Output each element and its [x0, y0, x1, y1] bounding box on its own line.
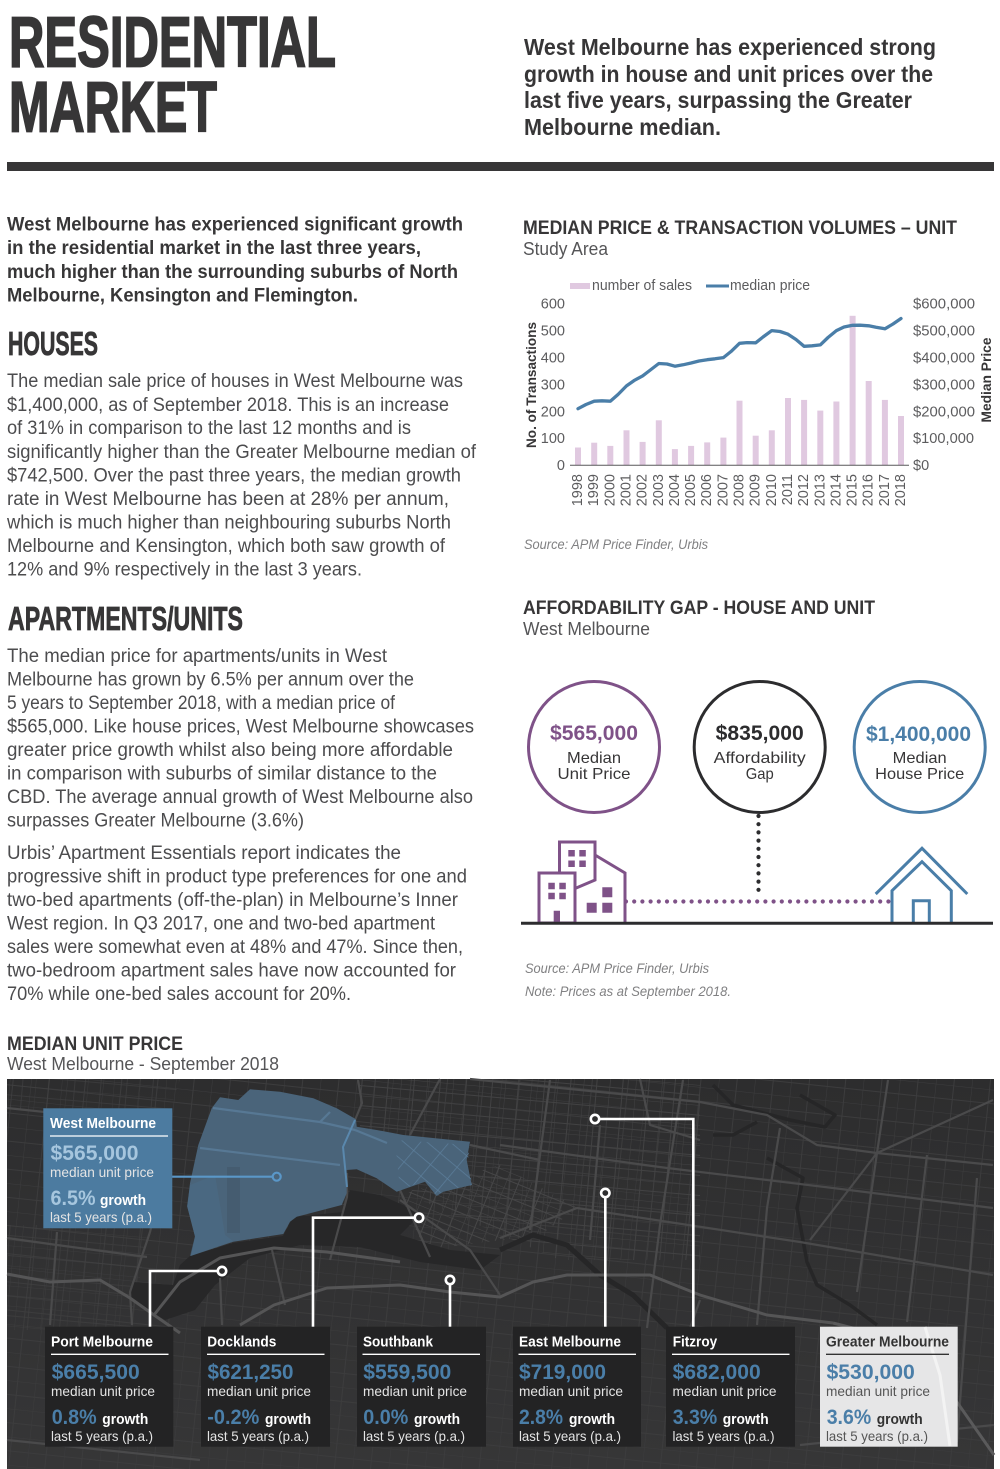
circle: median unit price	[528, 682, 660, 812]
card: southbank: 0.0%	[363, 1406, 409, 1429]
year labels: 2015	[845, 474, 861, 506]
year labels: 2005	[683, 474, 699, 506]
legend: number of sales	[592, 278, 692, 294]
right axis labels	[913, 296, 975, 474]
card: docklands: growth	[265, 1412, 311, 1428]
right axis labels: $500,000	[913, 324, 975, 340]
year labels: 1999	[586, 474, 602, 506]
card: southbank: median unit price	[363, 1383, 467, 1399]
card: port melbourne: growth	[102, 1412, 148, 1428]
year labels: 2000	[602, 474, 618, 506]
year labels: 2010	[764, 474, 780, 506]
card: southbank	[357, 1327, 486, 1447]
card: east melbourne	[513, 1327, 641, 1447]
lead statement: Melbourne median.	[524, 114, 721, 140]
left axis labels: 300	[541, 378, 565, 394]
year labels: 2004	[667, 474, 683, 506]
map heading	[7, 1034, 279, 1074]
card: fitzroy: median unit price	[672, 1383, 777, 1399]
circle: median unit price: Unit Price	[558, 766, 631, 783]
legend: median price	[730, 278, 810, 294]
bars: number of sales	[575, 316, 904, 465]
icon: apartment buildings	[539, 842, 625, 923]
year labels: 1998	[570, 474, 586, 506]
chart heading: MEDIAN PRICE & TRANSACTION VOLUMES – UNIT	[523, 218, 957, 239]
line: median price	[578, 318, 901, 409]
left axis labels: 500	[541, 324, 565, 340]
right axis labels: $0	[913, 458, 929, 474]
card: fitzroy: Fitzroy	[673, 1335, 717, 1351]
text block: apartment essentials: West region. In Q3 2017, one and two-bed apartment	[7, 914, 436, 934]
panel: affordability gap	[521, 598, 993, 999]
circle: affordability gap: Gap	[746, 766, 774, 783]
heading: apartments/units: APARTMENTS/UNITS	[8, 600, 243, 637]
panel: price and volume chart	[523, 218, 994, 552]
left axis labels: 0	[557, 458, 565, 474]
lead statement: last five years, surpassing the Greater	[524, 87, 912, 113]
card: greater melbourne	[820, 1327, 958, 1447]
card: docklands: median unit price	[207, 1383, 311, 1399]
year labels: 2017	[877, 474, 893, 506]
year labels: 2009	[748, 474, 764, 506]
text block: apartment essentials: two-bedroom apartment sales have now accounted for	[7, 960, 457, 982]
text block: apartments: surpasses Greater Melbourne (3.6%)	[7, 810, 304, 832]
circle: median house price: $1,400,000	[866, 723, 971, 746]
axis title: median price: Median Price	[978, 337, 994, 422]
panel: map	[7, 1079, 994, 1469]
text block: houses: 12% and 9% respectively in the last 3 years.	[7, 560, 362, 580]
card: west melbourne	[43, 1108, 172, 1228]
card: east melbourne: median unit price	[519, 1383, 623, 1399]
year labels: 2003	[651, 474, 667, 506]
year labels: 2006	[699, 474, 715, 506]
text block: apartments: in comparison with suburbs of similar distance to the	[7, 764, 437, 784]
circle: affordability gap: $835,000	[716, 722, 804, 745]
lead statement: West Melbourne has experienced strong	[524, 34, 936, 60]
circle: median unit price: Median	[567, 750, 621, 767]
circle: median house price: House Price	[875, 766, 964, 783]
card: fitzroy: $682,000	[673, 1361, 761, 1384]
text block: houses: The median sale price of houses in West Melbourne was	[7, 371, 463, 392]
year labels: 2008	[732, 474, 748, 506]
card: west melbourne: $565,000	[50, 1142, 138, 1165]
text block: apartments: greater price growth whilst also being more affordable	[7, 740, 453, 761]
icon: house	[876, 848, 967, 923]
card: docklands	[201, 1327, 330, 1447]
card: port melbourne: last 5 years (p.a.)	[51, 1428, 153, 1444]
card: east melbourne: last 5 years (p.a.)	[519, 1428, 621, 1444]
text block: houses: $742,500. Over the past three years, the median growth	[7, 466, 461, 486]
heading: houses: HOUSES	[8, 325, 98, 362]
map heading: West Melbourne - September 2018	[7, 1054, 279, 1074]
card: west melbourne: last 5 years (p.a.)	[50, 1209, 152, 1225]
text block: apartments: CBD. The average annual growth of West Melbourne also	[7, 787, 473, 808]
card: greater melbourne: Greater Melbourne	[826, 1335, 949, 1351]
area: west melbourne boundary	[187, 1089, 472, 1256]
circle: affordability gap: Affordability	[714, 750, 806, 767]
card: east melbourne: growth	[569, 1412, 615, 1428]
circle: median house price	[854, 682, 985, 812]
map background	[7, 1079, 994, 1469]
text block: houses: $1,400,000, as of September 2018. This is an increase	[7, 395, 449, 416]
affordability heading: West Melbourne	[523, 619, 650, 639]
connector: southbank	[446, 1276, 454, 1327]
year labels	[570, 474, 909, 506]
card: docklands: -0.2%	[207, 1406, 260, 1429]
text block: houses: which is much higher than neighbouring suburbs North	[6, 512, 451, 534]
text block: apartment essentials: sales were somewhat even at 48% and 47%. Since then,	[7, 937, 463, 958]
source: Source: APM Price Finder, Urbis	[524, 536, 708, 552]
intro paragraph	[7, 214, 463, 306]
card: greater melbourne: median unit price	[826, 1383, 930, 1399]
connector: east melbourne	[601, 1189, 610, 1327]
card: greater melbourne: 3.6%	[827, 1406, 871, 1429]
text block: houses: of 31% in comparison to the last 12 months and is	[7, 418, 411, 439]
text block: apartments: The median price for apartments/units in West	[7, 646, 388, 667]
right axis labels: $600,000	[913, 296, 975, 312]
card: port melbourne: $665,500	[52, 1361, 140, 1384]
title	[9, 4, 336, 148]
intro paragraph: much higher than the surrounding suburbs of North	[7, 261, 458, 283]
card: fitzroy: growth	[723, 1412, 769, 1428]
left axis labels: 600	[541, 296, 565, 312]
circle: affordability gap	[694, 682, 825, 812]
year labels: 2018	[893, 474, 909, 506]
chart heading: Study Area	[523, 239, 609, 259]
left axis labels: 400	[541, 350, 565, 366]
card: fitzroy	[666, 1327, 795, 1447]
intro paragraph: Melbourne, Kensington and Flemington.	[7, 284, 358, 306]
year labels: 2007	[715, 474, 731, 506]
left axis labels: 100	[541, 431, 565, 447]
lead statement	[524, 34, 936, 140]
card: docklands: last 5 years (p.a.)	[207, 1428, 309, 1444]
connector: fitzroy	[591, 1115, 693, 1327]
card: southbank: $559,500	[363, 1361, 451, 1384]
text block: houses: rate in West Melbourne has been at 28% per annum,	[7, 489, 449, 510]
year labels: 2011	[780, 474, 796, 505]
text block: apartments: $565,000. Like house prices, West Melbourne showcases	[7, 716, 474, 738]
text block: apartment essentials: 70% while one-bed sales account for 20%.	[7, 984, 351, 1005]
card: port melbourne: median unit price	[51, 1383, 155, 1399]
year labels: 2002	[635, 474, 651, 506]
dotted connector: horizontal	[626, 899, 892, 904]
card: west melbourne: growth	[100, 1193, 146, 1209]
card: docklands: $621,250	[208, 1361, 294, 1384]
source and note: Note: Prices as at September 2018.	[525, 983, 731, 999]
connector: west melbourne	[172, 1173, 281, 1181]
circle: median unit price: $565,000	[550, 722, 638, 745]
text block: apartments: Melbourne has grown by 6.5% per annum over the	[7, 670, 414, 690]
right axis labels: $200,000	[913, 404, 975, 420]
source and note: Source: APM Price Finder, Urbis	[525, 960, 709, 976]
text block: apartment essentials: Urbis’ Apartment Essentials report indicates the	[7, 843, 401, 864]
affordability heading	[523, 598, 875, 639]
year labels: 2014	[828, 474, 844, 506]
text block: apartment essentials: two-bed apartments (off-the-plan) in Melbourne’s Inner	[7, 890, 459, 911]
card: fitzroy: 3.3%	[673, 1406, 717, 1429]
affordability heading: AFFORDABILITY GAP - HOUSE AND UNIT	[523, 598, 875, 619]
text block: apartment essentials: progressive shift in product type preferences for one and	[7, 866, 467, 888]
chart heading	[523, 218, 957, 259]
text block: apartments	[7, 646, 474, 832]
intro paragraph: West Melbourne has experienced significant growth	[7, 214, 463, 236]
card: docklands: Docklands	[207, 1335, 276, 1351]
ground line	[521, 922, 993, 925]
source and note	[525, 960, 731, 999]
text block: apartment essentials	[7, 843, 467, 1005]
text block: houses: significantly higher than the Greater Melbourne median of	[7, 442, 477, 463]
intro paragraph: in the residential market in the last three years,	[7, 237, 421, 259]
card: port melbourne	[45, 1327, 173, 1447]
card: east melbourne: East Melbourne	[519, 1335, 621, 1351]
card: southbank: growth	[414, 1412, 460, 1428]
left axis labels	[541, 296, 565, 474]
card: southbank: Southbank	[363, 1335, 434, 1351]
text block: apartments: 5 years to September 2018, with a median price of	[7, 693, 396, 714]
card: greater melbourne: growth	[877, 1412, 923, 1428]
legend	[570, 278, 810, 294]
year labels: 2013	[812, 474, 828, 506]
map heading: MEDIAN UNIT PRICE	[7, 1034, 183, 1055]
card: west melbourne: West Melbourne	[50, 1116, 156, 1132]
axis title: transactions: No. of Transactions	[523, 322, 539, 448]
card: west melbourne: 6.5%	[50, 1187, 96, 1210]
year labels: 2001	[618, 474, 634, 506]
left axis labels: 200	[541, 404, 565, 420]
connector: port melbourne	[150, 1267, 226, 1327]
right axis labels: $100,000	[913, 431, 974, 447]
card: east melbourne: $719,000	[519, 1361, 606, 1384]
connector: docklands	[313, 1214, 423, 1327]
card: east melbourne: 2.8%	[519, 1406, 563, 1429]
lead statement: growth in house and unit prices over the	[524, 61, 933, 87]
card: greater melbourne: last 5 years (p.a.)	[826, 1428, 928, 1444]
title: RESIDENTIAL	[9, 4, 336, 82]
right axis labels: $400,000	[913, 350, 975, 366]
dotted connector: vertical	[756, 816, 761, 897]
card: southbank: last 5 years (p.a.)	[363, 1428, 465, 1444]
text block: houses: Melbourne and Kensington, which both saw growth of	[7, 536, 446, 557]
text block: houses	[6, 371, 477, 580]
title: MARKET	[9, 68, 217, 148]
year labels: 2016	[861, 474, 877, 506]
circle: median house price: Median	[893, 750, 947, 767]
right axis labels: $300,000	[913, 378, 975, 394]
card: west melbourne: median unit price	[50, 1164, 154, 1180]
year labels: 2012	[796, 474, 812, 506]
card: greater melbourne: $530,000	[826, 1361, 915, 1384]
card: port melbourne: 0.8%	[52, 1406, 97, 1429]
card: fitzroy: last 5 years (p.a.)	[672, 1428, 774, 1444]
card: port melbourne: Port Melbourne	[51, 1335, 153, 1351]
